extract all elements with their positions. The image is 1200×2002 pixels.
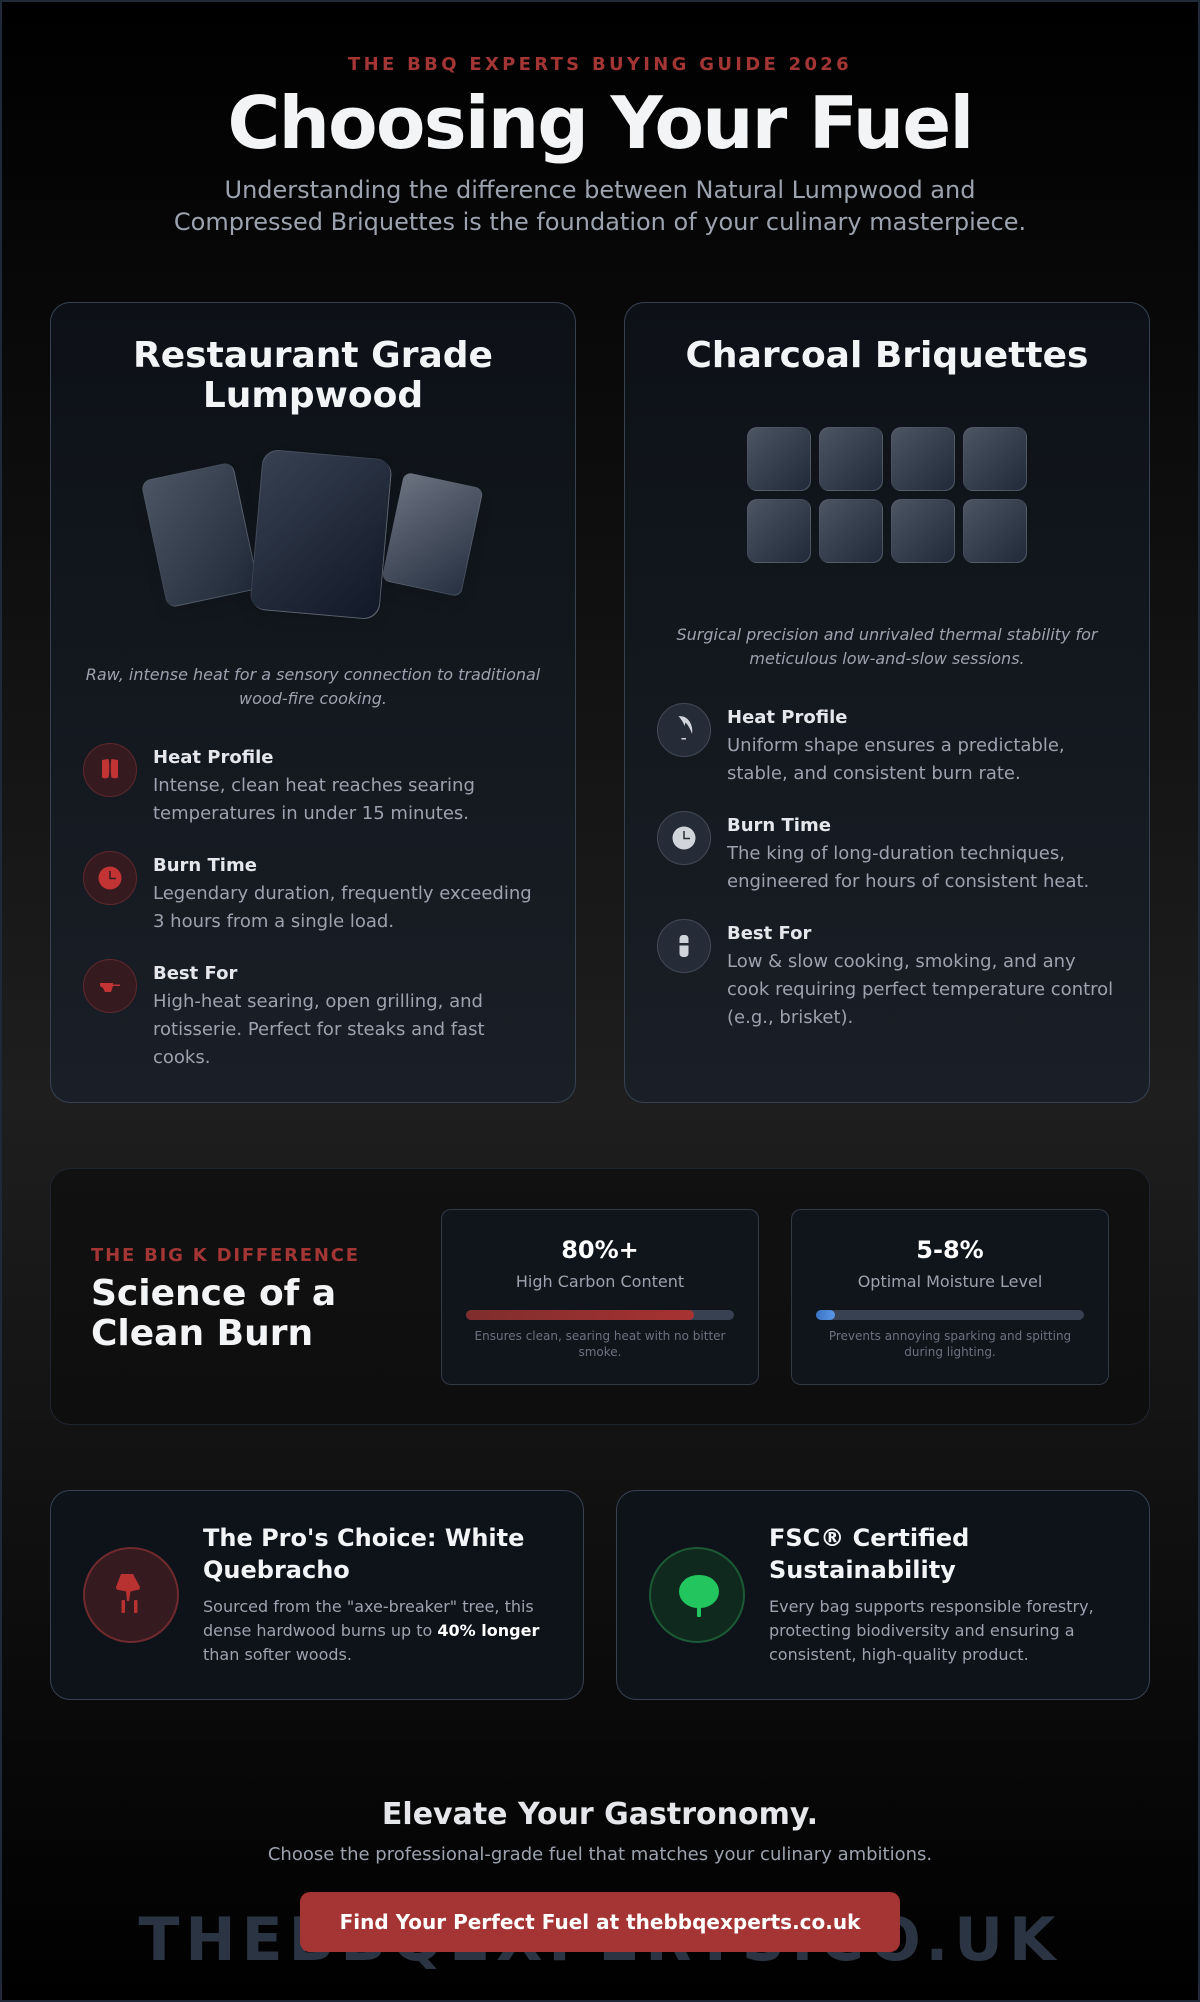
panel: white quebracho	[50, 1490, 584, 1700]
panel: restaurant grade lumpwood	[50, 302, 576, 1103]
text: white quebracho: than softer woods.	[203, 1645, 352, 1664]
text: fsc: protecting biodiversity and ensuring a	[769, 1621, 1075, 1640]
heading: white quebracho: Quebracho	[203, 1556, 350, 1584]
text: white quebracho	[203, 1597, 540, 1664]
description: briquettes	[676, 625, 1098, 668]
text: burn time	[726, 843, 1089, 892]
text: fsc: Every bag supports responsible forestry,	[769, 1597, 1094, 1616]
text: heat profile: Intense, clean heat reaches searing	[153, 775, 475, 796]
subtitle: Understanding the difference between Natural Lumpwood and	[225, 176, 975, 204]
text: best for: Low & slow cooking, smoking, and any	[727, 951, 1076, 972]
text: fsc	[769, 1597, 1094, 1664]
feature: heat profile	[83, 743, 475, 824]
heading: briquettes: Charcoal Briquettes	[686, 335, 1088, 376]
bar: moisture	[816, 1310, 1084, 1320]
bar: carbon	[466, 1310, 734, 1320]
label: heat profile: Heat Profile	[727, 707, 847, 728]
icon: quebracho tree	[83, 1547, 179, 1643]
text: heat profile: Uniform shape ensures a predictable,	[727, 735, 1065, 756]
description: briquettes: Surgical precision and unrivaled thermal stability for	[676, 625, 1098, 644]
note: carbon	[475, 1329, 726, 1359]
label: heat profile: Heat Profile	[153, 747, 273, 768]
text: best for	[153, 991, 485, 1068]
heading: lumpwood	[133, 335, 493, 416]
label: best for: Best For	[727, 923, 811, 944]
description: lumpwood: Raw, intense heat for a sensory connection to traditional	[86, 665, 540, 684]
feature: heat profile	[657, 703, 1065, 784]
call to action text: Choose the professional-grade fuel that matches your culinary ambitions.	[268, 1844, 932, 1865]
panel: charcoal briquettes	[624, 302, 1150, 1103]
description: lumpwood	[86, 665, 540, 708]
value: 5-8%: 5-8%	[916, 1236, 984, 1264]
note: carbon: Ensures clean, searing heat with no bitter	[475, 1329, 725, 1343]
label: burn time: Burn Time	[727, 815, 831, 836]
note: moisture	[829, 1329, 1071, 1359]
heading: fsc certified: Sustainability	[769, 1556, 956, 1584]
feature: burn time	[83, 851, 532, 932]
text: burn time: 3 hours from a single load.	[153, 911, 394, 932]
text: burn time: engineered for hours of consistent heat.	[727, 871, 1089, 892]
heading: white quebracho	[203, 1524, 524, 1584]
icon: flame	[657, 703, 711, 757]
icon: clock	[657, 811, 711, 865]
button: Find Your Perfect Fuel at thebbqexperts.co.uk	[340, 1910, 860, 1934]
heading: fsc certified: FSC® Certified	[769, 1524, 969, 1552]
heading: lumpwood: Restaurant Grade	[133, 335, 493, 376]
description: briquettes: meticulous low-and-slow sessions.	[749, 649, 1025, 668]
text: burn time: The king of long-duration techniques,	[727, 843, 1065, 864]
text: heat profile: temperatures in under 15 minutes.	[153, 803, 469, 824]
label: carbon: High Carbon Content	[516, 1272, 684, 1291]
title: Choosing Your Fuel	[227, 81, 973, 165]
icon: leaf	[649, 1547, 745, 1643]
text: heat profile	[727, 735, 1065, 784]
button	[300, 1892, 900, 1952]
text: best for: High-heat searing, open grilling, and	[153, 991, 483, 1012]
feature: best for	[83, 959, 485, 1068]
text: burn time: Legendary duration, frequently exceeding	[153, 883, 532, 904]
text: best for	[727, 951, 1113, 1028]
text: white quebracho: dense hardwood burns up to 40% longer	[203, 1621, 539, 1640]
icon: clock	[83, 851, 137, 905]
subtitle	[174, 176, 1026, 236]
stat card: moisture	[791, 1209, 1109, 1385]
icon: heat	[83, 743, 137, 797]
heading: science of a clean burn: Science of a	[91, 1273, 336, 1314]
label: burn time: Burn Time	[153, 855, 257, 876]
call to action heading: Elevate Your Gastronomy.	[382, 1797, 818, 1832]
note: carbon: smoke.	[578, 1345, 622, 1359]
eyebrow: buying guide: THE BBQ EXPERTS BUYING GUIDE 2026	[348, 54, 852, 75]
heading: science of a clean burn: Clean Burn	[91, 1313, 313, 1354]
text: best for: rotisserie. Perfect for steaks and fast	[153, 1019, 485, 1040]
icon: pan	[83, 959, 137, 1013]
note: moisture: Prevents annoying sparking and spitting	[829, 1329, 1071, 1343]
icon: capsule	[657, 919, 711, 973]
text: white quebracho: Sourced from the "axe-breaker" tree, this	[203, 1597, 534, 1616]
description: lumpwood: wood-fire cooking.	[239, 689, 387, 708]
eyebrow: big k difference: THE BIG K DIFFERENCE	[91, 1245, 360, 1266]
subtitle: Compressed Briquettes is the foundation of your culinary masterpiece.	[174, 208, 1026, 236]
label: best for: Best For	[153, 963, 237, 984]
text: burn time	[153, 883, 532, 932]
text: heat profile	[153, 775, 475, 824]
text: best for: cook requiring perfect temperature control	[727, 979, 1113, 1000]
stat card: carbon	[441, 1209, 759, 1385]
heading: lumpwood: Lumpwood	[203, 375, 423, 416]
text: best for: cooks.	[153, 1047, 210, 1068]
panel: science of a clean burn	[50, 1168, 1150, 1425]
value: 80%+: 80%+	[561, 1236, 639, 1264]
heading: white quebracho: The Pro's Choice: White	[203, 1524, 524, 1552]
illustration: lumpwood chunks	[142, 450, 482, 619]
feature: best for	[657, 919, 1113, 1028]
watermark: THEBBQEXPERTS.CO.UK	[138, 1905, 1061, 1975]
note: moisture: during lighting.	[904, 1345, 996, 1359]
panel: fsc sustainability	[616, 1490, 1150, 1700]
feature: burn time	[657, 811, 1089, 892]
text: fsc: consistent, high-quality product.	[769, 1645, 1029, 1664]
illustration: briquette grid	[747, 427, 1027, 563]
text: best for: (e.g., brisket).	[727, 1007, 853, 1028]
text: heat profile: stable, and consistent burn rate.	[727, 763, 1021, 784]
heading: fsc certified	[769, 1524, 969, 1584]
label: moisture: Optimal Moisture Level	[858, 1272, 1042, 1291]
heading: science of a clean burn	[91, 1273, 336, 1354]
